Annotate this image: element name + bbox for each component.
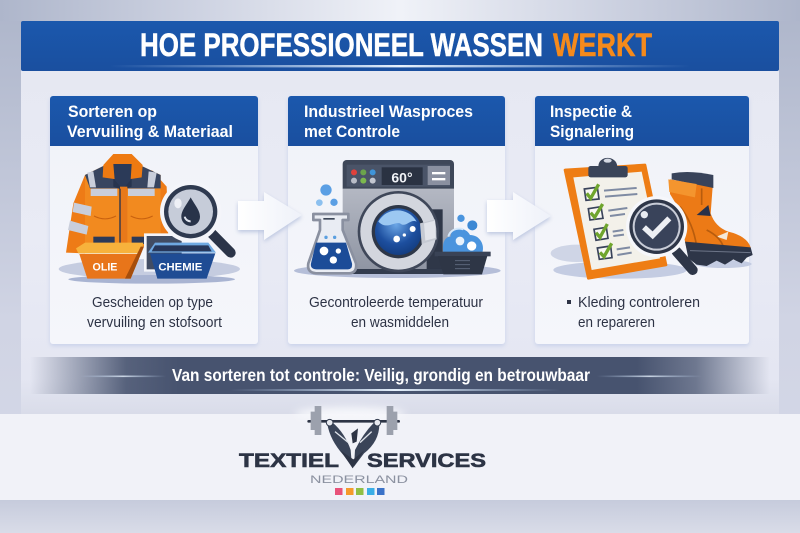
caption: Kleding controleren [578, 294, 700, 311]
caption: Gecontroleerde temperatuur [309, 294, 483, 311]
heading [304, 103, 473, 141]
summary band [30, 357, 770, 394]
heading [550, 103, 634, 141]
heading [67, 103, 233, 141]
caption: Gescheiden op type [92, 294, 213, 311]
logo: textiel services nederland [239, 406, 486, 495]
basket [435, 252, 491, 274]
arrow: step 2 to 3 [487, 192, 551, 242]
colour squares [335, 488, 384, 495]
caption: vervuiling en stofsoort [87, 314, 223, 331]
heading: Sorteren op [68, 103, 157, 121]
bin: olie: OLIE [93, 261, 117, 273]
caption [87, 294, 223, 331]
dark box behind [144, 233, 182, 272]
caption [567, 294, 700, 331]
heading: Inspectie & [550, 103, 632, 121]
logo subtitle: NEDERLAND [310, 474, 408, 486]
clipboard [565, 158, 666, 278]
washer: 60° [391, 169, 413, 185]
magnifier [626, 196, 693, 270]
bin: olie [76, 243, 144, 279]
bin: chemie: CHEMIE [158, 261, 202, 273]
panel: step 2 wasproces [288, 96, 505, 346]
bin: chemie [148, 243, 216, 279]
jacket sleeves [66, 170, 168, 253]
logo wordmark [239, 451, 486, 472]
flask [308, 184, 356, 273]
barbell icon [307, 406, 400, 468]
footer strip [0, 414, 800, 533]
illustration: clipboard, boot, magnifier [551, 158, 753, 279]
foam [443, 215, 483, 253]
heading: Signalering [550, 123, 634, 141]
boot [668, 172, 753, 266]
heading: met Controle [304, 123, 400, 141]
jacket body [85, 166, 161, 247]
caption: en repareren [578, 314, 655, 331]
illustration: washing machine, flask, basket [294, 160, 501, 278]
arrow: step 1 to 2 [238, 192, 302, 242]
logo wordmark: TEXTIEL [239, 451, 339, 472]
heading: Industrieel Wasproces [304, 103, 473, 121]
logo wordmark: SERVICES [367, 451, 486, 472]
caption [309, 294, 483, 331]
title banner [21, 21, 779, 71]
heading: Vervuiling & Materiaal [67, 123, 233, 141]
caption: en wasmiddelen [351, 314, 449, 331]
title: WERKT [553, 27, 652, 63]
title: HOE PROFESSIONEEL WASSEN [140, 27, 543, 63]
illustration: jacket, bins, magnifier [59, 154, 240, 284]
washer [343, 160, 454, 274]
panel: step 1 sorteren [50, 96, 258, 346]
magnifier [160, 181, 231, 253]
summary text: Van sorteren tot controle: Veilig, grondig en betrouwbaar [172, 365, 590, 385]
checklist [584, 184, 637, 259]
panel: step 3 inspectie [535, 96, 753, 346]
content panel [21, 60, 779, 414]
